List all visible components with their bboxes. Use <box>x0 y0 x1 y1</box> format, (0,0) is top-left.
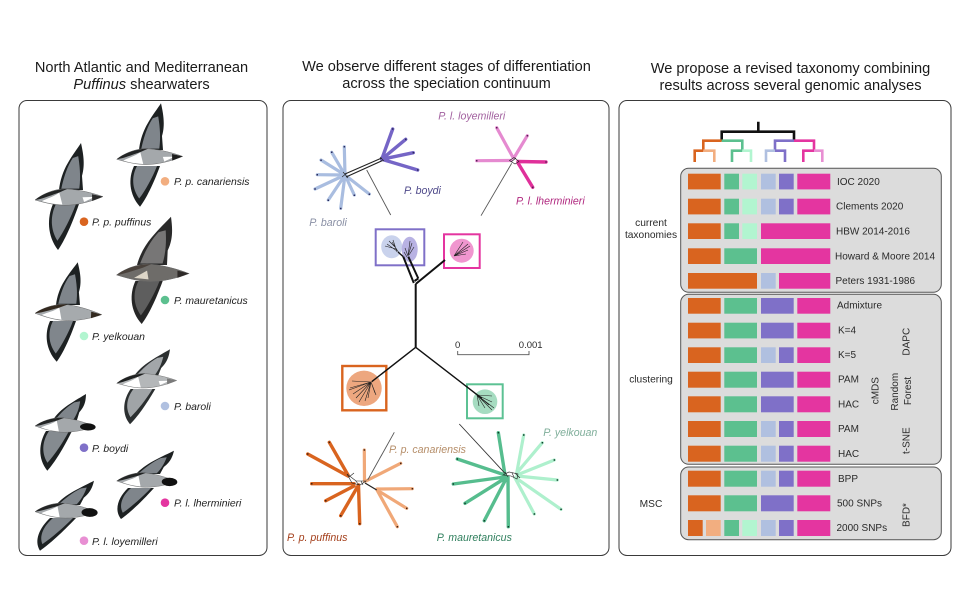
title: speciation continuum: across the speciation continuum <box>342 76 551 92</box>
bird: P. p. puffinus <box>35 143 103 250</box>
row: Admixture <box>688 298 882 314</box>
legend: P. yelkouan: P. yelkouan <box>92 332 145 343</box>
box: baroli and boydi clade <box>376 229 424 265</box>
scale bar: 0.001 <box>519 340 543 351</box>
bird: P. l. lherminieri <box>107 451 186 519</box>
legend: P. p. canariensis: P. p. canariensis <box>174 177 249 188</box>
group label: current taxonomies: taxonomies <box>625 230 677 241</box>
row: t-SNE HAC <box>688 446 859 462</box>
legend: P. boydi: P. boydi <box>92 444 129 455</box>
label: P. baroli: P. baroli <box>309 217 347 229</box>
box: mauretanicus and yelkouan clade <box>467 384 503 418</box>
row: 500 SNPs: 500 SNPs <box>837 498 882 510</box>
dendrogram <box>695 122 822 162</box>
method label: t-SNE: t-SNE <box>902 427 912 454</box>
group label: current taxonomies: current <box>635 218 667 229</box>
network: loyemilleri and lherminieri <box>476 127 547 216</box>
row: Howard & Moore 2014 <box>688 248 935 264</box>
legend: P. l. lherminieri: P. l. lherminieri <box>174 498 242 510</box>
row: t-SNE PAM <box>688 421 859 437</box>
panel: revised taxonomy <box>619 100 951 556</box>
row: cMDS HAC <box>688 396 859 412</box>
group box: clustering <box>681 294 941 464</box>
legend: P. mauretanicus: P. mauretanicus <box>174 296 248 307</box>
panel: speciation continuum networks <box>283 100 609 556</box>
group label: current taxonomies <box>625 218 677 241</box>
row: Howard & Moore 2014: Howard & Moore 2014 <box>835 252 935 262</box>
row: t-SNE HAC: HAC <box>838 449 859 460</box>
network: puffinus and canariensis <box>307 432 413 528</box>
label: P. p. canariensis: P. p. canariensis <box>389 444 467 456</box>
panel: shearwater species <box>19 100 267 556</box>
row: K=5: K=5 <box>838 350 857 361</box>
row: Peters 1931-1986 <box>688 273 915 289</box>
method label: Random Forest: Random <box>890 373 901 411</box>
title: shearwaters <box>35 60 248 93</box>
row: BPP <box>688 471 858 487</box>
bird: P. boydi <box>34 394 98 471</box>
bird: P. l. loyemilleri <box>26 481 106 551</box>
title: revised taxonomy: We propose a revised taxonomy combining <box>651 61 930 77</box>
method label: Random Forest <box>890 373 914 411</box>
bird: P. baroli <box>116 349 182 424</box>
row: HBW 2014-2016: HBW 2014-2016 <box>836 226 910 238</box>
box: puffinus clade <box>342 366 386 410</box>
row: Clements 2020: Clements 2020 <box>836 202 904 212</box>
row: IOC 2020: IOC 2020 <box>837 177 880 188</box>
title: revised taxonomy <box>651 61 930 94</box>
network: mauretanicus and yelkouan <box>453 424 562 528</box>
label: P. p. puffinus: P. p. puffinus <box>287 532 348 544</box>
bird: P. mauretanicus <box>117 217 189 324</box>
row: IOC 2020 <box>688 174 880 189</box>
row: cMDS HAC: HAC <box>838 400 859 410</box>
method label: cMDS: cMDS <box>870 377 882 404</box>
central tree <box>342 229 503 418</box>
row: Peters 1931-1986: Peters 1931-1986 <box>836 276 915 287</box>
method label: BFD*: BFD* <box>902 503 912 527</box>
group label: MSC: MSC <box>640 499 662 510</box>
network: baroli and boydi <box>314 128 418 215</box>
title: shearwaters: North Atlantic and Mediterranean <box>35 60 248 76</box>
legend: P. boydi <box>80 443 129 455</box>
row: K=4 <box>688 323 857 338</box>
scale bar: 0 <box>455 340 460 351</box>
method label: DAPC: DAPC <box>902 328 912 356</box>
title: revised taxonomy: results across several genomic analyses <box>660 78 922 94</box>
label: P. l. loyemilleri: P. l. loyemilleri <box>438 110 506 122</box>
group label: clustering: clustering <box>629 374 673 386</box>
row: Admixture: Admixture <box>837 300 882 312</box>
row: 2000 SNPs <box>688 520 887 536</box>
legend: P. p. puffinus: P. p. puffinus <box>92 218 151 228</box>
row: Clements 2020 <box>688 199 904 214</box>
row: K=5 <box>688 347 857 363</box>
title: shearwaters: Puffinus shearwaters <box>73 77 210 93</box>
legend: P. baroli: P. baroli <box>174 402 211 413</box>
scale bar <box>455 340 543 355</box>
group box: MSC <box>681 467 941 540</box>
box: lherminieri clade <box>444 234 480 268</box>
group box: current taxonomies <box>681 168 941 292</box>
label: P. boydi: P. boydi <box>404 185 442 197</box>
row: 500 SNPs <box>688 495 882 511</box>
method label: Random Forest: Forest <box>903 377 914 405</box>
title: speciation continuum <box>302 59 591 92</box>
bird: P. p. canariensis <box>116 103 183 207</box>
legend: P. l. loyemilleri: P. l. loyemilleri <box>92 537 158 548</box>
row: cMDS PAM: PAM <box>838 374 859 386</box>
label: P. yelkouan: P. yelkouan <box>543 427 597 439</box>
row: t-SNE PAM: PAM <box>838 424 859 435</box>
label: P. mauretanicus: P. mauretanicus <box>437 532 513 544</box>
row: 2000 SNPs: 2000 SNPs <box>836 523 887 534</box>
bird: P. yelkouan <box>35 262 102 362</box>
row: K=4: K=4 <box>838 326 857 336</box>
label: P. l. lherminieri: P. l. lherminieri <box>516 196 585 208</box>
row: HBW 2014-2016 <box>688 223 910 239</box>
title: speciation continuum: We observe different stages of differentiation <box>302 59 591 75</box>
row: BPP: BPP <box>838 474 858 485</box>
row: cMDS PAM <box>688 372 859 388</box>
